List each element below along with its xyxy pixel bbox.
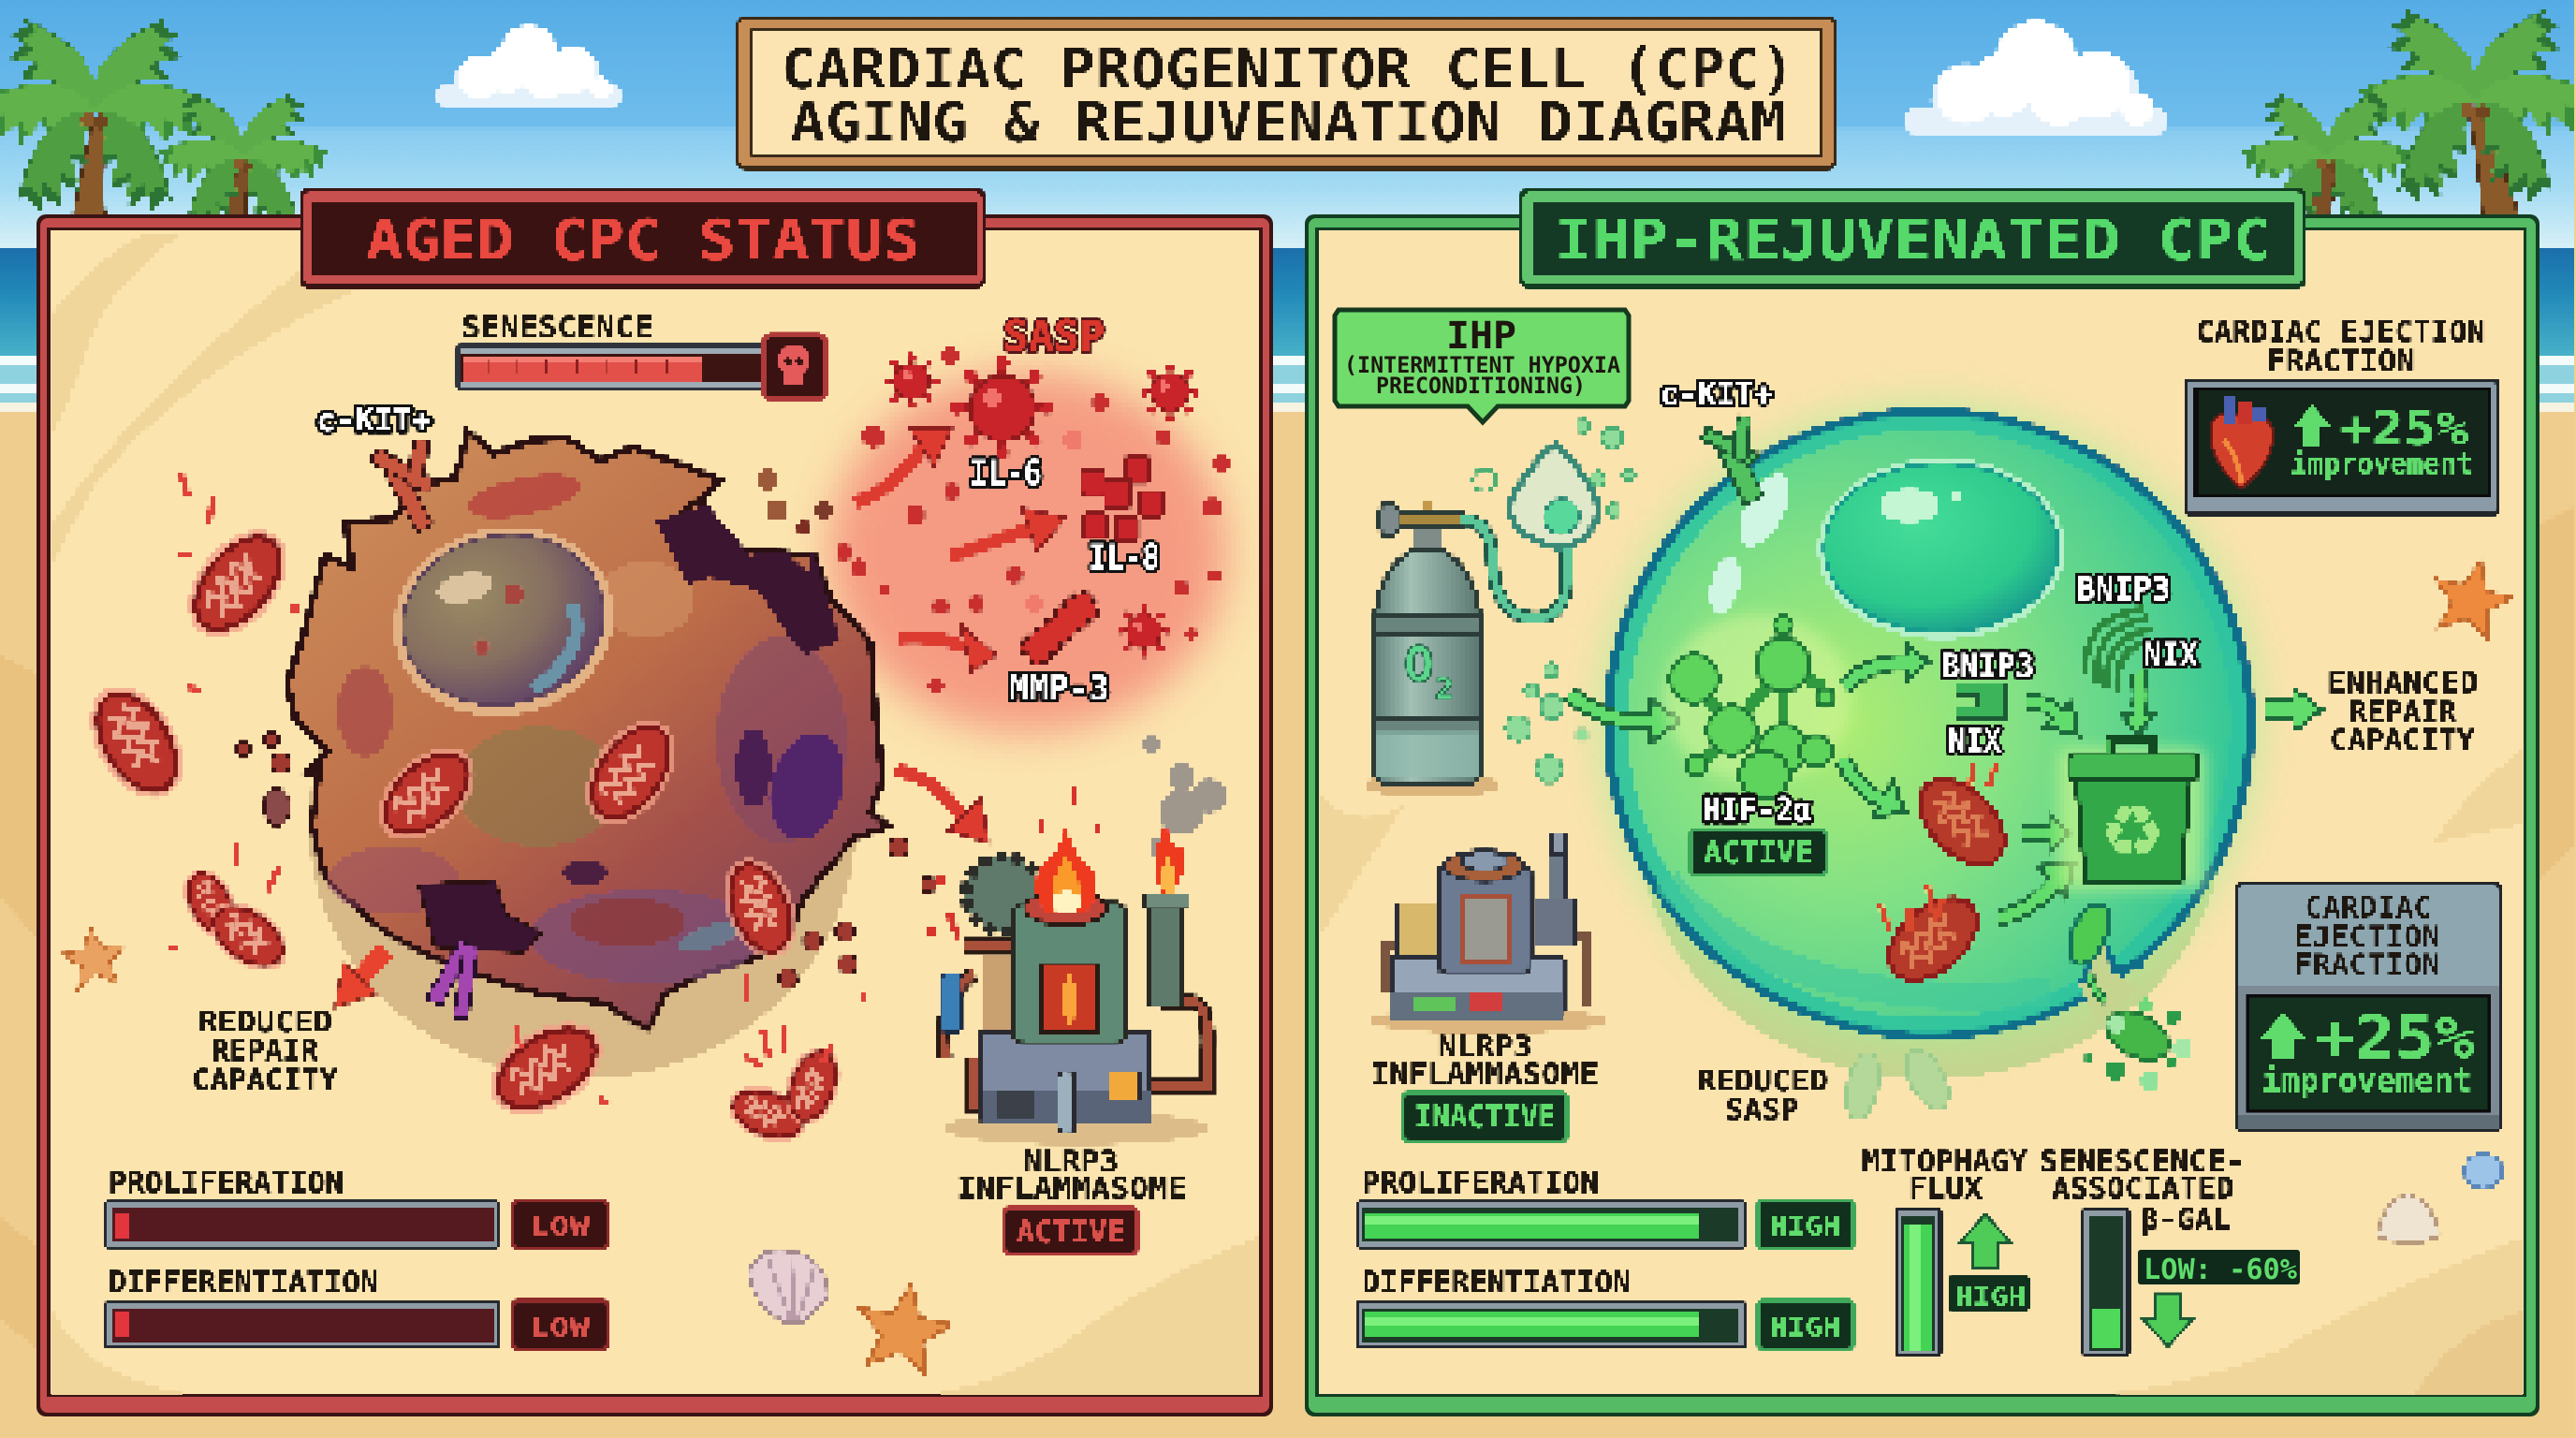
starfish <box>850 1275 958 1378</box>
label: NLRP3 inflammasome <box>957 1145 1187 1206</box>
membrane tear: upper right <box>655 505 841 655</box>
label: mitophagy flux <box>1862 1145 2027 1206</box>
label: BNIP3 upper: BNIP3 <box>2076 571 2171 609</box>
pipes <box>944 946 1208 1105</box>
bar: proliferation low <box>104 1200 501 1249</box>
icon: IL-8 cubes <box>1082 457 1163 541</box>
text: reduced SASP: REDUCED <box>1697 1064 1828 1098</box>
nucleus <box>1818 458 2065 639</box>
icon: HIF-2a molecule <box>1664 614 1852 800</box>
label: NLRP3 inflammasome: INFLAMMASOME <box>1370 1058 1599 1092</box>
aged cell <box>287 432 887 1029</box>
cell shadow <box>1638 569 2222 1078</box>
badge: inactive: INACTIVE <box>1414 1098 1556 1135</box>
icon: skull <box>764 335 826 399</box>
mitochondrion free <box>72 670 201 814</box>
badge: high: HIGH <box>1955 1283 2026 1312</box>
badge: high <box>1758 1200 1853 1249</box>
tank shadow <box>1365 771 1500 798</box>
icon: oxygen tank and mask <box>1372 445 1599 785</box>
callout: IHP: (INTERMITTENT HYPOXIA <box>1344 352 1621 378</box>
sparks near furnace <box>927 786 1101 939</box>
label: NLRP3 inflammasome: INFLAMMASOME <box>957 1172 1187 1206</box>
arrow: clamp to bin <box>2027 702 2078 735</box>
label: mitophagy flux: FLUX <box>1909 1172 1983 1206</box>
pebble: blue <box>2465 1154 2502 1188</box>
starfish <box>2424 551 2520 643</box>
icon: small virus <box>1140 362 1200 422</box>
callout: IHP: PRECONDITIONING) <box>1376 373 1586 399</box>
text: reduced repair capacity: REDUCED <box>198 1005 332 1039</box>
flames <box>1035 825 1095 913</box>
panel: IHP-rejuvenated CPC <box>1305 214 2539 1416</box>
arrow: reduced repair <box>335 950 386 1007</box>
membrane gap <box>2080 941 2139 1022</box>
cloud: right <box>1906 21 2166 135</box>
recycling symbol: ♻ <box>2100 790 2165 874</box>
artwork layer: rejuvenated cell scene <box>1320 405 2524 1394</box>
tank oxygen label: O <box>1404 638 1434 694</box>
monitor: ejection fraction large: improvement <box>2261 1062 2472 1100</box>
label: differentiation: DIFFERENTIATION <box>1362 1266 1631 1299</box>
mitochondrion damaged <box>1870 879 1996 999</box>
callout: IHP <box>1335 310 1629 422</box>
damage sparks <box>1877 763 1999 933</box>
text: reduced repair capacity: REPAIR <box>212 1034 318 1068</box>
header: aged CPC status: AGED CPC STATUS <box>366 208 920 273</box>
highlights <box>1730 467 1799 553</box>
panel: aged CPC status <box>37 214 1273 1416</box>
badge: low <box>513 1200 607 1249</box>
chimney <box>1149 903 1183 1006</box>
label: NLRP3 inflammasome <box>1370 1030 1599 1092</box>
text: enhanced repair capacity: CAPACITY <box>2330 724 2475 757</box>
mitochondrion free <box>475 1004 619 1133</box>
label: mitophagy flux: MITOPHAGY <box>1862 1145 2027 1179</box>
cell shadow <box>309 569 856 1078</box>
nucleus <box>376 507 631 736</box>
text: reduced repair capacity: CAPACITY <box>192 1064 338 1097</box>
label: proliferation: PROLIFERATION <box>1362 1167 1599 1200</box>
shell: pale <box>2378 1194 2439 1243</box>
title line 2: AGING & REJUVENATION DIAGRAM <box>790 90 1786 154</box>
text: enhanced repair capacity <box>2327 667 2479 757</box>
SASP cloud <box>829 373 1226 732</box>
label: senescence-associated beta-gal: β-GAL <box>2141 1203 2231 1237</box>
label: differentiation: DIFFERENTIATION <box>109 1266 378 1299</box>
icon: NLRP3 machine (inactive) <box>1371 833 1605 1034</box>
icon: IL-6 virus <box>951 357 1054 460</box>
header: IHP-rejuvenated CPC: IHP-REJUVENATED CPC <box>1555 208 2271 273</box>
arrow: mitochondrion to bin <box>2023 816 2071 850</box>
base <box>982 1031 1150 1123</box>
icon: MMP-3 enzyme <box>1018 589 1101 668</box>
mitochondrion healthy <box>1900 760 2024 884</box>
palm: small left <box>151 80 334 242</box>
mitochondrion at cell edge <box>710 848 810 968</box>
arrow: to inflammasome <box>896 770 988 843</box>
dark vacuole <box>736 728 771 807</box>
tank oxygen label <box>1404 638 1454 706</box>
icon: recycling bin <box>2059 740 2205 889</box>
monitor: ejection fraction large <box>2234 882 2502 1132</box>
icon: small virus <box>884 353 940 409</box>
dark vacuole <box>563 859 607 886</box>
badge: low <box>513 1300 607 1349</box>
starfish <box>58 922 130 990</box>
label: c-KIT+: c-KIT+ <box>316 402 432 438</box>
badge: active: ACTIVE <box>1704 834 1813 871</box>
damage sparks <box>168 471 865 1107</box>
hose <box>1462 520 1567 618</box>
arrow: to BNIP3 <box>1843 643 1928 687</box>
arrow: damaged to bin <box>1998 863 2074 918</box>
oxygen bubbles <box>1473 419 1634 783</box>
badge: high <box>1758 1300 1853 1349</box>
text: reduced SASP: SASP <box>1725 1093 1799 1127</box>
label: c-KIT+: c-KIT+ <box>1660 375 1773 412</box>
label: senescence-associated beta-gal: SENESCENCE- <box>2040 1145 2245 1179</box>
SASP particle specks <box>757 347 1229 694</box>
receptor: purple broken <box>427 940 477 1020</box>
mitochondrion free <box>169 512 306 654</box>
gauge: beta-gal <box>2081 1208 2130 1357</box>
badge: active <box>1004 1208 1137 1254</box>
debris <box>237 732 936 988</box>
sand swirls <box>2110 1238 2524 1394</box>
SASP label: SASP <box>1003 311 1105 361</box>
header: IHP-rejuvenated CPC <box>1519 188 2306 288</box>
icon: small virus <box>1117 604 1171 658</box>
badge: low: LOW <box>530 1313 591 1343</box>
text: reduced repair capacity <box>192 1005 338 1097</box>
dark vacuole <box>758 725 856 848</box>
arrow up <box>1960 1214 2011 1269</box>
arrow up <box>2260 1013 2306 1059</box>
sand swirls <box>52 236 393 562</box>
text: enhanced repair capacity: ENHANCED <box>2327 667 2479 700</box>
title plaque <box>736 16 1837 170</box>
label: HIF-2alpha: HIF-2α <box>1703 791 1811 829</box>
bar: differentiation high <box>1355 1300 1747 1349</box>
label: MMP-3: MMP-3 <box>1009 669 1109 708</box>
cloud: left <box>437 25 621 106</box>
text: cardiac ejection fraction: CARDIAC EJECTION <box>2196 315 2485 349</box>
mitochondrion inside cell <box>361 730 492 858</box>
badge: inactive <box>1403 1093 1567 1141</box>
palm: large right <box>2347 0 2576 218</box>
label: NLRP3 inflammasome: NLRP3 <box>1023 1145 1119 1179</box>
bar: differentiation low <box>104 1300 501 1349</box>
label: NLRP3 inflammasome: NLRP3 <box>1438 1030 1532 1064</box>
gear <box>966 857 1041 932</box>
smoke <box>1144 737 1226 858</box>
label: senescence-associated beta-gal <box>2040 1145 2245 1237</box>
label: NIX lower: NIX <box>1948 723 2001 760</box>
arrow: enhanced repair <box>2265 688 2321 731</box>
arrow: coil to bin <box>2121 672 2155 735</box>
text: reduced SASP <box>1697 1064 1828 1127</box>
interface layer: labels and meters <box>104 311 1187 1349</box>
receptor: c-KIT healthy <box>1702 416 1764 505</box>
core cylinder <box>1015 903 1125 1044</box>
text: enhanced repair capacity: REPAIR <box>2349 696 2456 729</box>
badge: low -60%: LOW: -60% <box>2144 1254 2297 1286</box>
title line 1: CARDIAC PROGENITOR CELL (CPC) <box>781 37 1795 101</box>
receptor: c-KIT damaged <box>371 439 434 532</box>
arrow down <box>2143 1295 2193 1346</box>
label: NIX upper: NIX <box>2144 637 2198 674</box>
monitor: ejection fraction small: improvement <box>2291 448 2473 481</box>
badge: high: HIGH <box>1770 1211 1840 1241</box>
mitochondrion broken <box>721 1039 850 1152</box>
green particles <box>2085 998 2192 1090</box>
callout: IHP: IHP <box>1446 315 1516 358</box>
badge: high: HIGH <box>1770 1312 1840 1343</box>
icon: NLRP3 inflammasome furnace (active) <box>942 737 1226 1145</box>
text: cardiac ejection fraction: FRACTION <box>2267 345 2415 378</box>
label: senescence-associated beta-gal: ASSOCIATED <box>2052 1172 2234 1206</box>
faded SASP remnants <box>1841 1044 1957 1123</box>
tissue blotches <box>463 466 585 526</box>
arrow: to MMP-3 <box>900 624 996 671</box>
monitor: ejection fraction large: CARDIAC <box>2305 891 2432 925</box>
palm: large left <box>0 1 223 227</box>
label: IL-6: IL-6 <box>970 453 1042 493</box>
header: aged CPC status <box>300 188 986 288</box>
label: BNIP3 lower: BNIP3 <box>1941 648 2034 685</box>
badge: high <box>1949 1276 2029 1312</box>
arrow: to IL-8 <box>949 508 1065 557</box>
senescence label: SENESCENCE <box>461 311 653 345</box>
arrow: oxygen to HIF <box>1569 694 1680 743</box>
badge: low: LOW <box>530 1212 591 1241</box>
mitochondrion inside cell <box>568 704 694 841</box>
arrow: to mitochondrion <box>1842 758 1906 816</box>
monitor: ejection fraction large: +25% <box>2315 1004 2475 1072</box>
monitor: ejection fraction small: +25% <box>2339 402 2468 456</box>
monitor: ejection fraction large: EJECTION <box>2294 920 2440 954</box>
mask <box>1508 445 1599 548</box>
gauge: mitophagy flux <box>1895 1208 1942 1357</box>
exported mitochondrion <box>2100 1002 2176 1069</box>
label: IL-8: IL-8 <box>1089 537 1160 578</box>
icon: receptor clamp <box>1956 683 2007 718</box>
membrane tear: lower <box>418 881 541 952</box>
cell glow <box>1602 405 2257 1042</box>
label: proliferation: PROLIFERATION <box>109 1167 344 1200</box>
arrow: to IL-6 <box>855 429 951 503</box>
icon: coil <box>2086 609 2153 693</box>
artwork layer: aged cell scene <box>52 236 1257 1394</box>
palm: small right <box>2235 80 2419 242</box>
bar: proliferation high <box>1355 1200 1747 1249</box>
released fragment <box>2061 899 2117 1002</box>
mitochondrion broken <box>173 860 300 984</box>
badge: active <box>1690 829 1826 875</box>
monitor: ejection fraction large: FRACTION <box>2294 948 2440 982</box>
icon: heart <box>2211 397 2273 489</box>
badge: active: ACTIVE <box>1017 1213 1125 1250</box>
tank oxygen label: 2 <box>1435 673 1454 706</box>
shell <box>749 1251 827 1323</box>
text: cardiac ejection fraction <box>2196 315 2485 378</box>
rejuvenated cell <box>1608 412 2250 1035</box>
interface layer: labels and meters <box>1355 315 2502 1357</box>
arrow up <box>2294 404 2331 446</box>
senescence meter <box>456 335 826 399</box>
monitor: ejection fraction small <box>2184 378 2499 516</box>
